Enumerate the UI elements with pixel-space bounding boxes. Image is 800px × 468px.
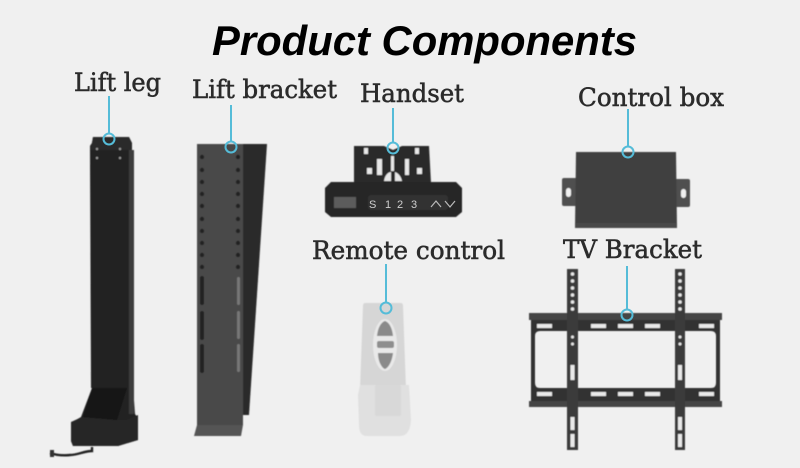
callout: lift bracket [226,105,236,152]
callout: remote control [380,264,392,314]
callout: control box [622,109,634,158]
callout: handset [388,108,398,154]
label: control box: Control box [578,83,724,112]
label: remote control: Remote control [312,236,505,265]
handset: 2 [397,199,403,211]
lift leg [50,137,138,457]
handset [325,146,462,217]
label: handset: Handset [360,79,464,108]
remote control [358,303,411,436]
label: lift bracket: Lift bracket [192,75,337,104]
label: lift leg: Lift leg [74,68,161,97]
handset: 3 [411,199,417,211]
TV bracket [529,269,722,450]
handset: 1 [385,199,391,211]
control box [562,152,690,228]
title: Product Components [212,17,637,64]
callout: lift leg [104,96,114,144]
lift bracket [194,144,267,436]
callout: TV bracket [622,266,632,320]
label: TV bracket: TV Bracket [563,235,702,264]
handset: S [369,199,376,211]
